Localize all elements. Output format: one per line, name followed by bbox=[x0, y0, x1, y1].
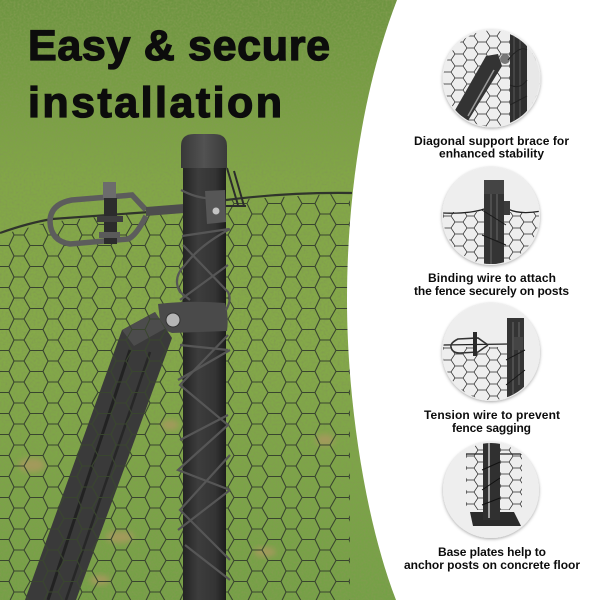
caption 3 bbox=[424, 408, 560, 435]
circle photo: base plate bbox=[443, 442, 539, 538]
caption 2 bbox=[414, 271, 569, 298]
caption 1 bbox=[414, 134, 569, 160]
caption 2: the fence securely on posts bbox=[414, 284, 569, 298]
caption 4: anchor posts on concrete floor bbox=[404, 558, 580, 572]
top tension wire bbox=[0, 193, 352, 233]
feature 1: diagonal brace bbox=[414, 28, 569, 160]
title bbox=[28, 22, 330, 127]
caption 4 bbox=[404, 545, 580, 572]
feature 4: base plate bbox=[404, 442, 580, 572]
feature 3: tension wire bbox=[424, 303, 560, 435]
caption 4: Base plates help to bbox=[438, 545, 546, 559]
post bracket and clip bbox=[205, 168, 246, 224]
binding wires on post bbox=[177, 190, 230, 580]
caption 1: enhanced stability bbox=[439, 146, 544, 160]
circle photo: tension wire bbox=[440, 303, 540, 403]
caption 3: fence sagging bbox=[452, 421, 531, 435]
brace clamp and bolt bbox=[158, 302, 228, 333]
mesh on brace bbox=[25, 312, 172, 600]
caption 2: Binding wire to attach bbox=[428, 271, 556, 285]
feature 2: binding wire bbox=[414, 167, 569, 298]
wire tensioner bbox=[50, 182, 184, 244]
diagonal brace bbox=[25, 312, 172, 600]
post cap bbox=[181, 134, 227, 168]
caption 3: Tension wire to prevent bbox=[424, 408, 560, 422]
white side panel bbox=[347, 0, 600, 600]
caption 1: Diagonal support brace for bbox=[414, 134, 569, 148]
title: installation bbox=[28, 79, 282, 127]
title: Easy & secure bbox=[28, 22, 330, 70]
main fence post bbox=[181, 134, 227, 600]
circle photo: brace bbox=[440, 28, 542, 130]
chicken wire mesh bbox=[0, 193, 350, 600]
circle photo: binding wire bbox=[440, 167, 544, 268]
